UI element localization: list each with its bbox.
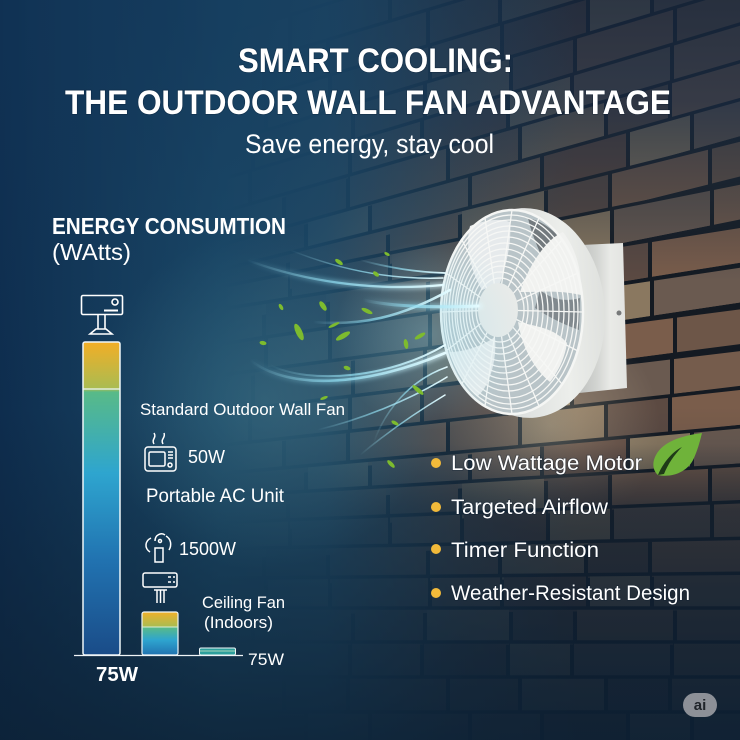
bar: standard outdoor: [83, 342, 120, 655]
chart heading: ENERGY CONSUMTION: [52, 213, 286, 239]
label: ceiling fan: (Indoors): [204, 613, 273, 632]
value: 1500w: 1500W: [179, 539, 236, 559]
airflow streaks and leaves: [247, 240, 525, 469]
ai badge: [683, 693, 717, 717]
label: standard outdoor wall fan: Standard Outdoor Wall Fan: [140, 400, 345, 419]
outer rim: [444, 204, 610, 422]
feature: weather-resistant design: Weather-Resistant Design: [451, 582, 690, 605]
subtitle: Save energy, stay cool: [245, 129, 494, 159]
title: [65, 42, 671, 122]
chart heading: (WAtts): [52, 239, 131, 265]
value: 50w: 50W: [188, 447, 225, 467]
wall fan: [441, 204, 627, 422]
label: ceiling fan: [202, 593, 285, 632]
label: ceiling fan: Ceiling Fan: [202, 593, 285, 612]
feature: low wattage motor: Low Wattage Motor: [451, 452, 642, 475]
icon: green leaf: [653, 433, 702, 476]
label: portable ac unit: Portable AC Unit: [146, 486, 285, 507]
bar: portable ac: [142, 612, 178, 655]
chart heading: [52, 213, 286, 265]
icon: wall ac unit: [143, 573, 177, 603]
bar chart: [74, 296, 345, 686]
feature: timer function: Timer Function: [451, 539, 599, 562]
title: SMART COOLING:: [238, 42, 513, 80]
axis: [74, 654, 243, 656]
bar: ceiling fan: [200, 648, 236, 655]
value: first bar: 75W: [96, 664, 138, 686]
value: third bar: 75W: [248, 650, 284, 669]
fan hub: [478, 283, 518, 337]
title: THE OUTDOOR WALL FAN ADVANTAGE: [65, 84, 671, 122]
icon: portable heater: [145, 433, 176, 471]
mounting box: [560, 243, 627, 395]
ai badge: ai: [694, 697, 706, 714]
icon: monitor unit: [82, 296, 122, 334]
icon: mist spray: [146, 534, 171, 562]
grill and blades: [441, 210, 583, 414]
feature: targeted airflow: Targeted Airflow: [451, 496, 609, 519]
feature list: [431, 452, 690, 605]
